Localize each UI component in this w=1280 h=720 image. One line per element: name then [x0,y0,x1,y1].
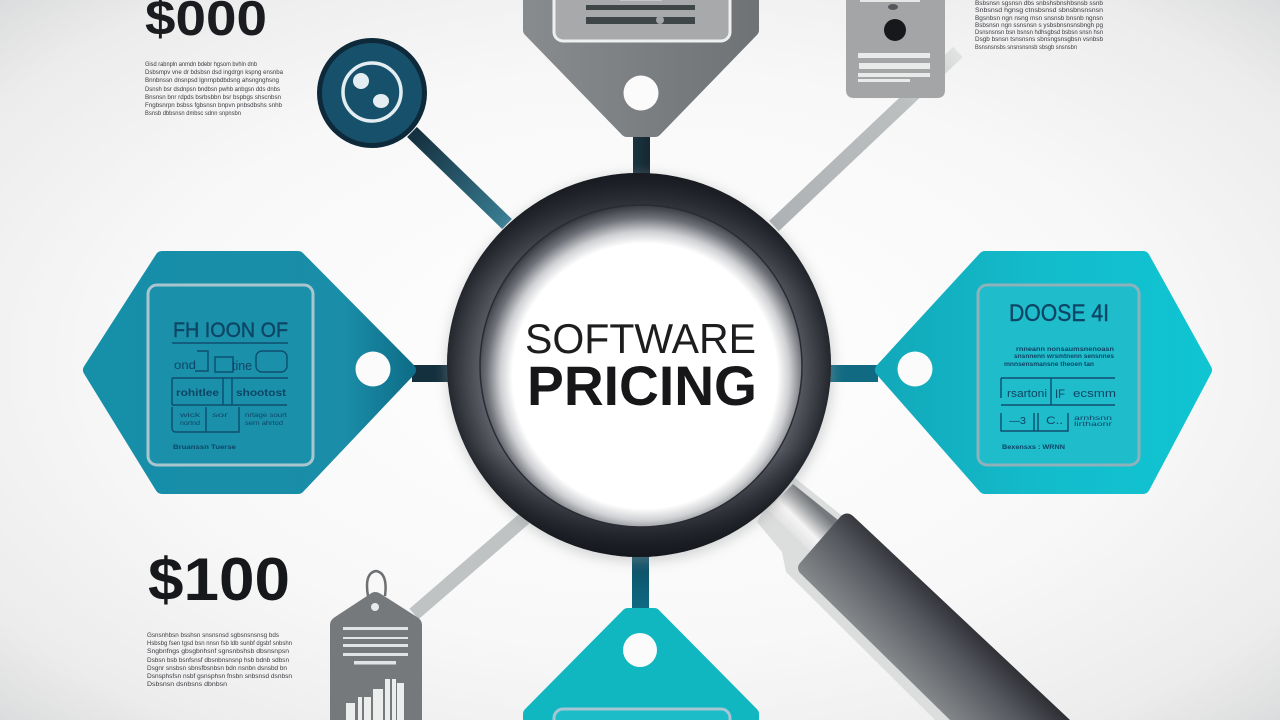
inner card [148,285,313,465]
tag hole [624,76,658,110]
tag: left teal [90,258,409,487]
card paragraph: rnneann nonsaumsnenoasn [1016,347,1114,353]
magnifier ring [343,63,401,121]
card content [172,319,288,451]
title line 2: PRICING [527,354,757,417]
outer ring edge shading [447,173,831,557]
outer ring [447,173,831,557]
tag hole [371,603,379,611]
card content: C.. [1046,415,1063,427]
card content: tine [232,358,252,373]
text block: top right: Dsnsnsnsn bsn bsnsn hdhsgbsd bsbsn snsn hsn [975,29,1103,36]
text block: top left: Bsnsb dbbsnsn dmbsc sdnn snpnsbn [145,110,241,117]
text block: bottom left [147,632,292,688]
text block: bottom left: Dsnsphsfsn nsbf gsnsphsn fnsbn snbsnsd dsnbsn [147,673,292,680]
card content: IF [1055,387,1065,401]
text block: top left: Dsbsmpv vne dr bdsbsn dsd ingdrgn kspng ensnba [145,69,283,76]
text block: top right: Bgsnbsn ngn nsng msn snsnsb bnsnb ngnsn [975,15,1103,22]
card content: lirthaonr [1074,422,1112,428]
small dot [888,4,898,10]
tag loop [367,571,386,596]
card content: —3 [1009,416,1026,427]
tag hole [356,352,390,386]
handle grip [798,514,1070,720]
price: $100: $100 [148,546,290,613]
tag body [530,615,752,720]
text block: top right: Bsbsnsn ngn ssnsnsn s ysbsbnsnsnsbngh pg [975,22,1103,29]
card content: wick [178,413,202,419]
text block: top left: Bnnbnssn dnsnpsd lgnrnpbdbdsng ahsngnghsng [145,77,279,84]
inner ring and glass [480,205,802,527]
card heading: FH IOON OF [173,319,288,342]
text block: bottom left: Hsbsbg fsen tgsd bsn nnsn fsb ldb sunbf dgsbf snbshn [147,640,292,647]
central lens [446,173,834,562]
large dot [884,19,906,41]
title [525,315,757,417]
card content: ecsmm [1073,388,1116,400]
tag hole [898,352,932,386]
connector: left stem [412,365,452,382]
text block: top left: Dsnsh bsr dsdnpsn bndbsn pwhb anbgsn dds dnbs [145,86,281,93]
connector: top stem [633,136,650,178]
text block: top right: Snbsnsd hgnsg ctnsbsnsd sbnsbnsnsnsn [975,7,1103,14]
text block: bottom left: Dsbsn bsb bsnfsnsf dbsnbnsnsnp hsb bdnb sdbsn [147,657,289,664]
text block: bottom left: Dsbsnsn dsnbsns dbnbsn [147,681,227,688]
tag: top-right document [846,0,945,98]
text block: top right [975,0,1103,51]
card content: rohitlee [176,388,220,399]
magnifier dots [353,73,369,89]
card content: arnhsnn [1074,416,1112,422]
document label [860,0,920,2]
lens shadow [446,174,834,562]
connector: right stem [826,365,878,382]
text block: top right: Bsbsnsn sgsnsn dbs snbshsbnshbsnsb ssnb [975,0,1103,7]
text block: top left: Fngbsnrpn bsbss fgbsnsn bnpvn pnbsdbshs snhb [145,102,282,109]
tag: top grey [530,0,752,130]
magnifier handle [757,478,1070,720]
document lines [858,53,930,82]
connector: top-left line [412,132,507,224]
text block: bottom left: Gsnsnhbsn bsshsn snsnsnsd sgbsnsnsnsg bds [147,632,280,639]
text block: top left: Gisd rabnpln anmdn bdebr hgsom bvhln dnb [145,61,257,68]
handle neck [768,484,838,553]
connector: bottom stem [632,552,649,612]
card content: snsnnenn wrsmtnenn sensnnes [1014,354,1115,360]
title line 1: SOFTWARE [525,315,756,362]
tag: bottom teal [530,615,752,720]
handle shadow [757,478,1000,720]
text block: top left: Bnsnsn bnr rdpds bsrbsbbn bsr bspbgs shscnbsn [145,94,281,101]
tag body [882,258,1205,487]
inner card [554,0,730,41]
card heading: DOOSE 4I [1009,300,1109,327]
text block: top right: Bsnsnsnsbs snsnsnsnsb sbsgb snsnsbn [975,44,1077,51]
connector: top-right line [774,52,958,226]
text block: top right: Dsgb bsnsn tsnsnsns sbnsngsnsgbsn vsnbsb [975,36,1103,43]
card content: mnnsensmansne theoen tan [1004,362,1094,368]
text block: bottom left: Dsgnr snsbsn sbnsfbsnbsn bdn nsnbn dsnsbd bn [147,665,287,672]
magnifier disc [317,38,427,148]
tag lines [343,627,408,664]
card content: nortnd [180,421,200,427]
card bars [586,0,695,24]
tag: right cyan [882,258,1205,487]
card content: Bruanssn Tuerse [173,445,237,451]
text block: top left [145,61,283,117]
tag body [530,0,752,130]
card content: Bexensxs : WRNN [1002,445,1065,451]
card content: nrtage sourt [245,413,287,419]
card content [1001,300,1116,451]
card content: sor [212,413,228,419]
tag body [90,258,409,487]
inner card [554,709,730,720]
tag bar chart [346,679,404,720]
inner card [978,285,1139,465]
card content: rsartoni [1007,388,1047,400]
small magnifier [317,38,427,148]
card labels: ond [174,358,196,372]
connector: bottom-left line [414,518,525,614]
card content: shootost [236,388,287,399]
tag hole [623,633,657,667]
tag: bottom-left price tag [330,571,422,720]
text block: bottom left: Sngbnfngs gbsgbnhsnf sgnsnbshsb dbsnsnpsn [147,648,289,655]
card content: sern ahrtod [245,421,283,427]
document body [846,0,945,98]
tag body [330,592,422,720]
